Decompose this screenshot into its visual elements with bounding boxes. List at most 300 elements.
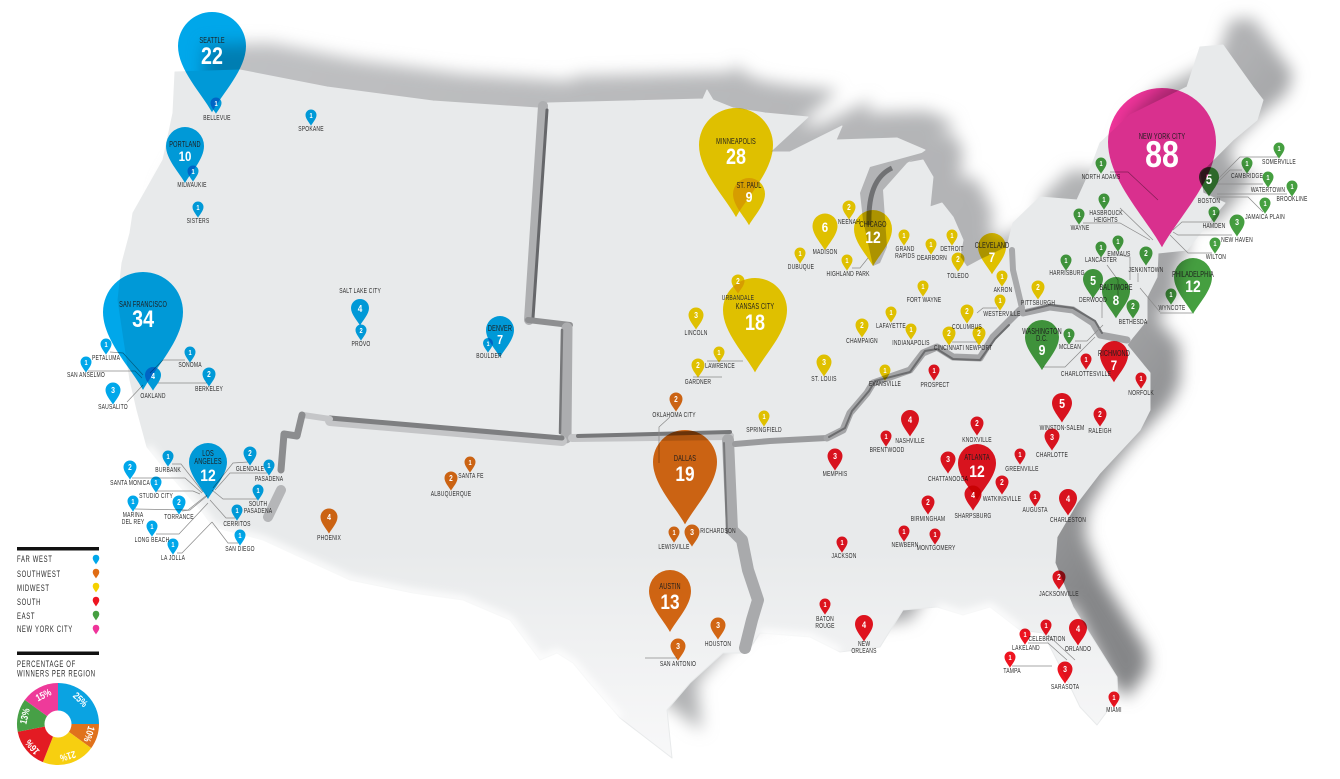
pin: Denver: 7 — [497, 332, 503, 347]
pin: Charleston — [1050, 489, 1086, 524]
pin: Burbank: BURBANK — [155, 466, 181, 474]
south region pins — [815, 341, 1154, 714]
pin: Norfolk: NORFOLK — [1128, 389, 1154, 397]
pin: Lincoln: 3 — [694, 310, 699, 320]
pin: Oakland: OAKLAND — [140, 392, 166, 400]
pin: Urbandale: 2 — [736, 276, 740, 286]
pin: Atlanta — [958, 444, 996, 500]
pin: Watkinsville: WATKINSVILLE — [983, 495, 1021, 503]
pin: Gardner — [685, 358, 711, 386]
pin: Cambridge — [1231, 158, 1263, 180]
pin: Newport — [966, 326, 992, 352]
pie chart: percentage of winners per region: 10% — [81, 725, 97, 743]
pin: San Francisco: 34 — [132, 305, 155, 332]
pin: Burbank — [155, 450, 181, 474]
legend row: east: EAST — [17, 611, 35, 621]
pin: Nashville: 4 — [908, 415, 912, 425]
pin: Derwood: 5 — [1090, 273, 1096, 288]
pin: Lawrence: 1 — [717, 350, 721, 357]
pin: Santa Fe — [458, 456, 484, 480]
far west region pins — [67, 12, 514, 562]
legend row: midwest: MIDWEST — [17, 583, 50, 593]
pin: Hasbrouck Heights — [1089, 194, 1123, 224]
pin: Boulder: 1 — [487, 342, 490, 348]
pin: Portland: 10 — [179, 148, 191, 164]
pin: Pittsburgh — [1021, 280, 1055, 307]
pin: St. Louis: 3 — [822, 357, 827, 367]
pin: Hasbrouck Heights: HEIGHTS — [1094, 216, 1118, 224]
pin: Boston — [1198, 167, 1220, 205]
pin: Montgomery: 1 — [933, 532, 937, 539]
pin: Austin — [649, 570, 691, 632]
pin: Torrance: TORRANCE — [164, 513, 194, 521]
pin: Sarasota: 3 — [1063, 664, 1068, 674]
pin: Dubuque: 1 — [798, 251, 802, 258]
pin: Norfolk — [1128, 372, 1154, 397]
pin: Bellevue: 1 — [214, 101, 218, 108]
pin: Petaluma — [92, 338, 121, 362]
pin: Dallas — [653, 430, 717, 524]
pin: Wilton: WILTON — [1206, 253, 1226, 261]
pin: Chicago — [854, 210, 892, 266]
pin: Cambridge: 1 — [1245, 161, 1249, 168]
pin: Toledo — [947, 252, 969, 280]
pin: Knoxville: KNOXVILLE — [962, 436, 992, 444]
pin: San Anselmo — [67, 356, 105, 379]
pin: Sharpsburg: 4 — [971, 490, 976, 500]
pin: Urbandale — [722, 274, 754, 302]
pin: Wyncote: WYNCOTE — [1159, 304, 1185, 312]
pin: New Orleans — [851, 615, 877, 655]
pin: Denver — [486, 316, 514, 357]
pin: Philadelphia: PHILADELPHIA — [1172, 271, 1214, 279]
pin: Studio City: 1 — [154, 480, 158, 487]
pin: Los Angeles — [189, 443, 227, 499]
pin: St. Louis — [811, 354, 837, 383]
pin: Sisters: 1 — [196, 205, 200, 212]
midwest region pins — [684, 108, 1055, 434]
pin: San Diego: 1 — [238, 533, 242, 540]
region fissures — [268, 106, 1127, 648]
pin: Baltimore: BALTIMORE — [1099, 284, 1133, 292]
pin: Charlottesville: CHARLOTTESVILLE — [1061, 370, 1111, 378]
pie chart: percentage of winners per region: 25% — [71, 690, 90, 709]
pin: Evansville: EVANSVILLE — [869, 380, 901, 388]
pin: Oklahoma City: 2 — [674, 394, 678, 404]
pin: Washington D.C. — [1022, 320, 1062, 370]
pin: Nashville — [895, 410, 925, 445]
pin: Houston: HOUSTON — [705, 640, 731, 648]
pin: Baton Rouge: BATON — [816, 615, 834, 623]
pin: Cincinnati: 2 — [947, 328, 951, 338]
pin: Celebration — [1028, 620, 1066, 643]
pin: Detroit: 1 — [950, 233, 954, 240]
pin: Sonoma: 1 — [188, 350, 192, 357]
pin: Watertown: WATERTOWN — [1251, 186, 1285, 194]
pin: Cerritos — [223, 504, 251, 528]
pin: Newbern — [892, 526, 919, 549]
pin: Sausalito: 3 — [111, 385, 116, 395]
pin: Milwaukie: 1 — [191, 169, 195, 176]
pin: Westerville — [983, 294, 1021, 318]
pie chart: percentage of winners per region — [17, 683, 99, 765]
pin: Jacksonville: JACKSONVILLE — [1039, 590, 1079, 598]
pin: Birmingham: 2 — [926, 497, 930, 507]
pin: Indianapolis: INDIANAPOLIS — [892, 339, 930, 347]
pin: New Orleans: NEW — [858, 640, 871, 648]
land surface — [118, 45, 1263, 758]
pin: St. Louis: ST. LOUIS — [811, 375, 837, 383]
pin: Madison: MADISON — [813, 248, 837, 256]
pin: Neenah — [838, 200, 860, 226]
pin: Torrance — [164, 496, 194, 521]
pin: Springfield: 1 — [762, 414, 766, 421]
pin: Atlanta: 12 — [969, 463, 985, 481]
pin: San Francisco: SAN FRANCISCO — [119, 301, 167, 309]
pin: Sarasota: SARASOTA — [1051, 683, 1080, 691]
pin: Portland: PORTLAND — [169, 141, 201, 149]
pin: Grand Rapids: GRAND — [895, 245, 915, 253]
pin: Champaign: CHAMPAIGN — [846, 337, 878, 345]
pin: Lewisville — [658, 526, 690, 551]
pin: Marina del Rey — [122, 496, 145, 526]
pin: South Pasadena — [244, 484, 273, 515]
pin: Atlanta: ATLANTA — [964, 454, 990, 462]
pin: Gardner: GARDNER — [685, 378, 711, 386]
pin: Pittsburgh: 2 — [1036, 282, 1040, 292]
pin: Grand Rapids: 1 — [902, 233, 906, 240]
pin: Provo: 2 — [359, 328, 363, 335]
pin: Chicago: CHICAGO — [860, 221, 887, 229]
pin: Wilton — [1206, 238, 1226, 261]
pin: La Jolla — [161, 538, 186, 562]
pin: Albuquerque: ALBUQUERQUE — [431, 490, 471, 498]
pin: McLean: MCLEAN — [1059, 343, 1081, 351]
pin: Chattanooga — [928, 452, 968, 483]
pin: Sisters — [187, 202, 209, 225]
pin: Oklahoma City — [652, 392, 696, 419]
pin: Torrance: 2 — [177, 497, 181, 507]
pin: Richardson: 3 — [690, 527, 695, 537]
pin: Los Angeles: 12 — [200, 467, 216, 485]
pin: Sharpsburg: SHARPSBURG — [954, 512, 992, 520]
pin: Salt Lake City — [339, 287, 381, 326]
pin: Bethesda: 2 — [1131, 301, 1135, 311]
pin: San Anselmo: SAN ANSELMO — [67, 371, 105, 379]
pin: North Adams: NORTH ADAMS — [1082, 173, 1120, 181]
pin: Miami: MIAMI — [1106, 706, 1122, 714]
pin: New Orleans: 4 — [862, 620, 866, 630]
pin: Jamaica Plain — [1245, 198, 1285, 221]
pin: Watertown — [1251, 172, 1285, 194]
pin: Brentwood — [870, 430, 905, 454]
pin: St. Paul: ST. PAUL — [737, 182, 761, 190]
pin: Minneapolis: MINNEAPOLIS — [716, 138, 756, 146]
pin: Emmaus: EMMAUS — [1107, 250, 1131, 258]
pin: Hasbrouck Heights: HASBROUCK — [1089, 209, 1123, 217]
pin: Lakeland: 1 — [1023, 632, 1027, 639]
pin: New Haven — [1221, 214, 1253, 244]
pin: Jacksonville — [1039, 570, 1079, 598]
pin: La Jolla: 1 — [171, 542, 175, 549]
pin: Richmond: 7 — [1111, 357, 1117, 373]
pin: Urbandale: URBANDALE — [722, 294, 754, 302]
pin: Knoxville — [962, 416, 992, 444]
pin: Memphis — [823, 448, 847, 478]
pin: Akron: 1 — [1000, 274, 1004, 281]
pin: Cincinnati: CINCINNATI — [934, 344, 964, 352]
pin: Madison — [812, 214, 838, 256]
pin: Derwood: DERWOOD — [1079, 296, 1107, 304]
pin: Springfield: SPRINGFIELD — [746, 426, 782, 434]
pin: Fort Wayne: 1 — [921, 284, 925, 291]
pin: Portland — [166, 127, 204, 183]
pin: Prospect — [920, 364, 950, 389]
pin: Berkeley — [195, 368, 223, 393]
pin: Tampa: 1 — [1008, 655, 1012, 662]
pin: Winston-Salem: 5 — [1059, 396, 1065, 411]
legend: percentage heading: PERCENTAGE OF — [17, 659, 76, 669]
pin: Santa Monica — [110, 460, 150, 487]
pin: Phoenix: 4 — [327, 512, 332, 522]
pin: Brentwood: BRENTWOOD — [870, 446, 905, 454]
pin: Jackson: JACKSON — [832, 552, 857, 560]
pin: Hamden — [1203, 206, 1226, 230]
pin: Milwaukie: MILWAUKIE — [177, 181, 207, 189]
pin: Bethesda: BETHESDA — [1119, 318, 1148, 326]
pin: Wayne: 1 — [1077, 212, 1081, 219]
pin: Newbern: NEWBERN — [892, 541, 919, 549]
pie chart: percentage of winners per region: 15% — [34, 686, 53, 704]
pin: Charleston: 4 — [1066, 494, 1070, 504]
legend: regions — [17, 547, 99, 634]
pin: Westerville: 1 — [998, 298, 1002, 305]
pin: Cincinnati — [934, 326, 964, 352]
pin: St. Paul — [733, 178, 765, 225]
southwest region pins — [317, 392, 736, 668]
pin: Celebration: CELEBRATION — [1028, 635, 1066, 643]
pin: Neenah: NEENAH — [838, 218, 860, 226]
pin: Montgomery — [917, 528, 956, 552]
pin: Hasbrouck Heights: 1 — [1102, 197, 1106, 204]
pin: Jamaica Plain: 1 — [1263, 201, 1267, 208]
pin: San Antonio: 3 — [676, 641, 681, 651]
pin: Grand Rapids — [895, 230, 915, 260]
pin: Marina del Rey: 1 — [131, 499, 135, 506]
pin: Jenkintown — [1129, 246, 1164, 274]
pin: Sharpsburg — [954, 486, 992, 520]
pin: Salt Lake City: 4 — [358, 303, 363, 314]
pin: Memphis: MEMPHIS — [823, 470, 847, 478]
pin: Lancaster — [1085, 242, 1117, 264]
pin: Baton Rouge: ROUGE — [815, 622, 835, 630]
pin: Jacksonville: 2 — [1057, 572, 1061, 582]
pin: Washington D.C.: 9 — [1039, 342, 1046, 358]
legend row: south: SOUTH — [17, 597, 41, 607]
pin: Marina del Rey: DEL REY — [122, 518, 145, 526]
pin: Champaign: 2 — [860, 320, 864, 330]
pin: Cambridge: CAMBRIDGE — [1231, 172, 1263, 180]
pin: Charlottesville — [1061, 354, 1111, 378]
pin: Seattle: 22 — [201, 42, 223, 69]
pin: Highland Park: HIGHLAND PARK — [827, 270, 870, 278]
pin: Brookline: 1 — [1290, 184, 1294, 191]
pin: New York City — [1108, 88, 1216, 247]
pin: Memphis: 3 — [833, 451, 838, 461]
pin: Columbus: 2 — [965, 306, 969, 316]
pin: Prospect: PROSPECT — [920, 381, 950, 389]
pin: Emmaus — [1107, 236, 1131, 258]
pin: Oakland — [140, 367, 166, 400]
pin: San Diego: SAN DIEGO — [225, 545, 255, 553]
pin: Montgomery: MONTGOMERY — [917, 544, 956, 552]
pin: Wayne: WAYNE — [1071, 224, 1089, 232]
pin: Neenah: 2 — [847, 202, 851, 212]
pin: Santa Monica: SANTA MONICA — [110, 479, 150, 487]
pin: Houston: 3 — [716, 620, 721, 630]
pin: Richmond: RICHMOND — [1098, 350, 1130, 358]
pin: Raleigh: RALEIGH — [1088, 427, 1112, 435]
pin: Raleigh — [1088, 408, 1112, 435]
pin: Baton Rouge — [815, 598, 835, 630]
pin: Cleveland — [975, 233, 1009, 274]
pin: Miami: 1 — [1112, 695, 1116, 702]
pin: Seattle — [178, 12, 246, 112]
pin: South Pasadena: 1 — [256, 488, 260, 495]
pin: Raleigh: 2 — [1098, 409, 1102, 419]
pin: Dubuque: DUBUQUE — [788, 263, 814, 271]
pin: Richardson — [684, 524, 736, 547]
pin: Houston — [705, 618, 731, 648]
pin: Petaluma: 1 — [104, 342, 108, 349]
pin: Champaign — [846, 318, 878, 345]
pin: Philadelphia: 12 — [1185, 278, 1201, 296]
pin: Baltimore — [1099, 277, 1133, 318]
legend row: southwest: SOUTHWEST — [17, 569, 61, 579]
pin: Winston-Salem — [1040, 393, 1084, 432]
pin: Oklahoma City: OKLAHOMA CITY — [652, 411, 696, 419]
pin: Evansville: 1 — [883, 368, 887, 375]
pin: Springfield — [746, 410, 782, 434]
pin: Dallas: 19 — [675, 464, 695, 486]
pin: Oakland: 4 — [151, 371, 156, 381]
pin: Boston: BOSTON — [1198, 197, 1220, 205]
pin: Lafayette: LAFAYETTE — [876, 322, 906, 330]
pin: Spokane: SPOKANE — [298, 125, 324, 133]
pin: Denver: DENVER — [488, 325, 512, 333]
pin: Lawrence: LAWRENCE — [705, 362, 735, 370]
pin: Charlotte — [1036, 428, 1068, 459]
pin: Richmond — [1098, 341, 1130, 382]
east region pins — [1022, 142, 1307, 370]
pin: Lafayette — [876, 306, 906, 330]
pin: Albuquerque — [431, 472, 471, 498]
pin: Jenkintown: 2 — [1144, 248, 1148, 258]
pin: Toledo: 2 — [956, 254, 960, 264]
pin: Washington D.C.: D.C. — [1036, 335, 1048, 343]
pin: North Adams — [1082, 158, 1120, 181]
pin: San Diego — [225, 530, 255, 553]
pin: Lancaster: LANCASTER — [1085, 256, 1117, 264]
pin: Orlando — [1065, 619, 1091, 653]
pin: San Antonio — [660, 638, 696, 668]
pin: Brookline: BROOKLINE — [1277, 195, 1307, 203]
pin: Augusta — [1022, 490, 1048, 514]
pin: Charleston: CHARLESTON — [1050, 516, 1086, 524]
pin: Sarasota — [1051, 662, 1080, 691]
pin: Cerritos: CERRITOS — [223, 520, 251, 528]
pin: Santa Fe: 1 — [468, 460, 472, 467]
pin: Pasadena: 1 — [267, 463, 271, 470]
pin: Lancaster: 1 — [1099, 245, 1103, 252]
pin: Jenkintown: JENKINTOWN — [1129, 266, 1164, 274]
pin: Lakeland: LAKELAND — [1012, 644, 1040, 652]
legend row: new york city: NEW YORK CITY — [17, 624, 73, 634]
pin: Augusta: 1 — [1033, 494, 1037, 501]
pin: Madison: 6 — [822, 219, 828, 235]
pin: Marina del Rey: MARINA — [123, 511, 144, 519]
pin: Lewisville: 1 — [672, 530, 676, 537]
pie chart: percentage of winners per region: 13% — [18, 707, 32, 725]
pin: Fort Wayne: FORT WAYNE — [907, 296, 941, 304]
pin: Richardson: RICHARDSON — [700, 527, 736, 535]
pin: Wayne — [1071, 208, 1089, 232]
pin: Petaluma: PETALUMA — [92, 354, 121, 362]
pin: Emmaus: 1 — [1116, 239, 1120, 246]
pin: Baton Rouge: 1 — [823, 602, 827, 609]
pin: Kansas City: 18 — [745, 311, 765, 335]
pin: Chattanooga: CHATTANOOGA — [928, 475, 968, 483]
pin: Newport: NEWPORT — [966, 344, 992, 352]
pin: Berkeley: BERKELEY — [195, 385, 223, 393]
pin: Augusta: AUGUSTA — [1022, 506, 1048, 514]
pin: Sisters: SISTERS — [187, 217, 209, 225]
pin: Burbank: 1 — [166, 454, 170, 461]
pin: Greenville: GREENVILLE — [1005, 465, 1039, 473]
pin: Lincoln: LINCOLN — [684, 329, 708, 337]
pin: Detroit: DETROIT — [940, 245, 964, 253]
pin: Wilton: 1 — [1213, 241, 1217, 248]
pin: Kansas City — [723, 278, 787, 372]
pin: La Jolla: LA JOLLA — [161, 554, 186, 562]
pin: Lawrence — [705, 346, 735, 370]
pin: Toledo: TOLEDO — [947, 272, 969, 280]
pin: Indianapolis: 1 — [909, 327, 913, 334]
pin: Los Angeles: LOS — [202, 450, 214, 458]
pin: Studio City: STUDIO CITY — [139, 492, 173, 500]
pin: Evansville — [869, 364, 901, 388]
pin: Sausalito — [98, 382, 128, 411]
pin: Dallas: DALLAS — [674, 455, 696, 463]
pin: Wyncote — [1159, 288, 1185, 312]
pin: Lakeland — [1012, 628, 1040, 652]
pin: Spokane: 1 — [309, 113, 313, 120]
pin: Watertown: 1 — [1266, 175, 1270, 182]
pin: Philadelphia — [1172, 258, 1214, 314]
pin: Tampa — [1003, 652, 1021, 675]
pin: Salt Lake City: SALT LAKE CITY — [339, 287, 381, 295]
pin: Hamden: 1 — [1212, 210, 1216, 217]
pin: South Pasadena: SOUTH — [249, 500, 267, 508]
pin: Seattle: SEATTLE — [199, 37, 225, 45]
pin: Sausalito: SAUSALITO — [98, 403, 128, 411]
pin: Pasadena — [255, 460, 284, 483]
pin: Phoenix: PHOENIX — [317, 534, 341, 542]
pin: Chicago: 12 — [865, 229, 881, 247]
pin: Baltimore: 8 — [1113, 292, 1119, 308]
pie chart: percentage of winners per region: 16% — [23, 737, 42, 757]
pin: Kansas City: KANSAS CITY — [736, 303, 774, 311]
